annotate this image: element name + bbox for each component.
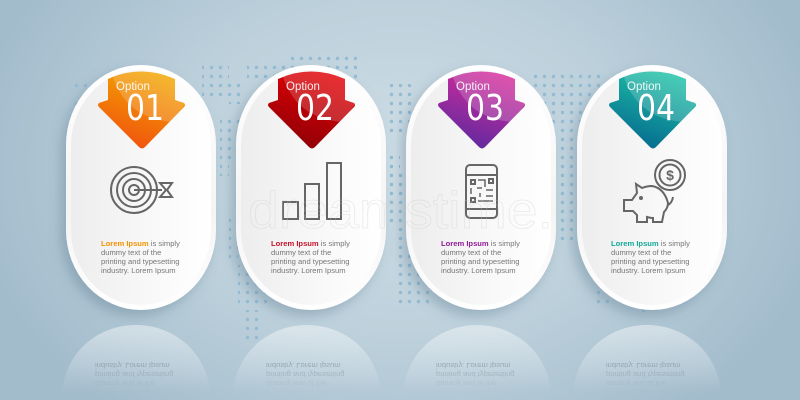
reflection 3: printing and typesetting [436, 370, 515, 379]
arrow badge: 01 [126, 88, 164, 129]
text block: Lorem Ipsum is simply [271, 239, 350, 248]
text block: printing and typesetting [101, 257, 180, 266]
card body [406, 65, 556, 310]
card body [236, 65, 386, 310]
icon: bar chart [283, 163, 341, 219]
arrow badge: 02 [296, 88, 334, 129]
card body [66, 65, 216, 310]
panel: option 04 [577, 65, 727, 310]
text block: dummy text of the [611, 248, 671, 257]
arrow badge: Option [116, 81, 150, 93]
text block [611, 239, 690, 275]
panel: option 02 [236, 65, 386, 310]
text block [441, 239, 520, 275]
arrow badge [268, 66, 358, 148]
arrow badge: Option [456, 81, 490, 93]
text block: dummy text of the [271, 248, 331, 257]
card body [577, 65, 727, 310]
panel: option 03 [406, 65, 556, 310]
text block: Lorem Ipsum is simply [101, 239, 180, 248]
reflection 4: industry. Lorem Ipsum [606, 361, 681, 370]
arrow badge: 03 [466, 88, 504, 129]
text block: dummy text of the [441, 248, 501, 257]
text block [271, 239, 350, 275]
text block [101, 239, 180, 275]
reflection 2 [236, 325, 378, 384]
reflection 3: industry. Lorem Ipsum [436, 361, 511, 370]
reflection 1: industry. Lorem Ipsum [95, 361, 170, 370]
text block: industry. Lorem Ipsum [441, 266, 516, 275]
watermark: dreamstime. [248, 182, 553, 240]
reflection 1: printing and typesetting [95, 370, 174, 379]
arrow badge [438, 66, 528, 148]
text block: printing and typesetting [271, 257, 350, 266]
reflection 2: industry. Lorem Ipsum [266, 361, 341, 370]
text block: industry. Lorem Ipsum [271, 266, 346, 275]
reflection 2: printing and typesetting [266, 370, 345, 379]
text block: industry. Lorem Ipsum [611, 266, 686, 275]
arrow badge: Option [627, 81, 661, 93]
panel: option 01 [66, 65, 216, 310]
text block: printing and typesetting [611, 257, 690, 266]
reflection 1 [64, 325, 207, 382]
arrow badge [98, 66, 188, 148]
reflection 2: dummy text of the [266, 379, 326, 388]
text block: dummy text of the [101, 248, 161, 257]
arrow badge: Option [286, 81, 320, 93]
icon: piggy bank with coin: $ [666, 167, 674, 183]
arrow badge [609, 66, 699, 148]
reflection 1: dummy text of the [95, 379, 155, 388]
arrow badge: 04 [637, 88, 675, 129]
reflection 3: dummy text of the [436, 379, 496, 388]
reflection 3 [406, 325, 548, 384]
reflection 4: printing and typesetting [606, 370, 685, 379]
text block: printing and typesetting [441, 257, 520, 266]
text block: Lorem Ipsum is simply [611, 239, 690, 248]
reflections of the cards [64, 325, 718, 384]
reflection 4 [576, 325, 718, 382]
icon: piggy bank with coin [624, 160, 685, 222]
text block: Lorem Ipsum is simply [441, 239, 520, 248]
icon: phone with QR code [466, 165, 497, 218]
icon: target [111, 167, 172, 213]
text block: industry. Lorem Ipsum [101, 266, 176, 275]
dotted world map [72, 52, 651, 342]
reflection 4: dummy text of the [606, 379, 666, 388]
